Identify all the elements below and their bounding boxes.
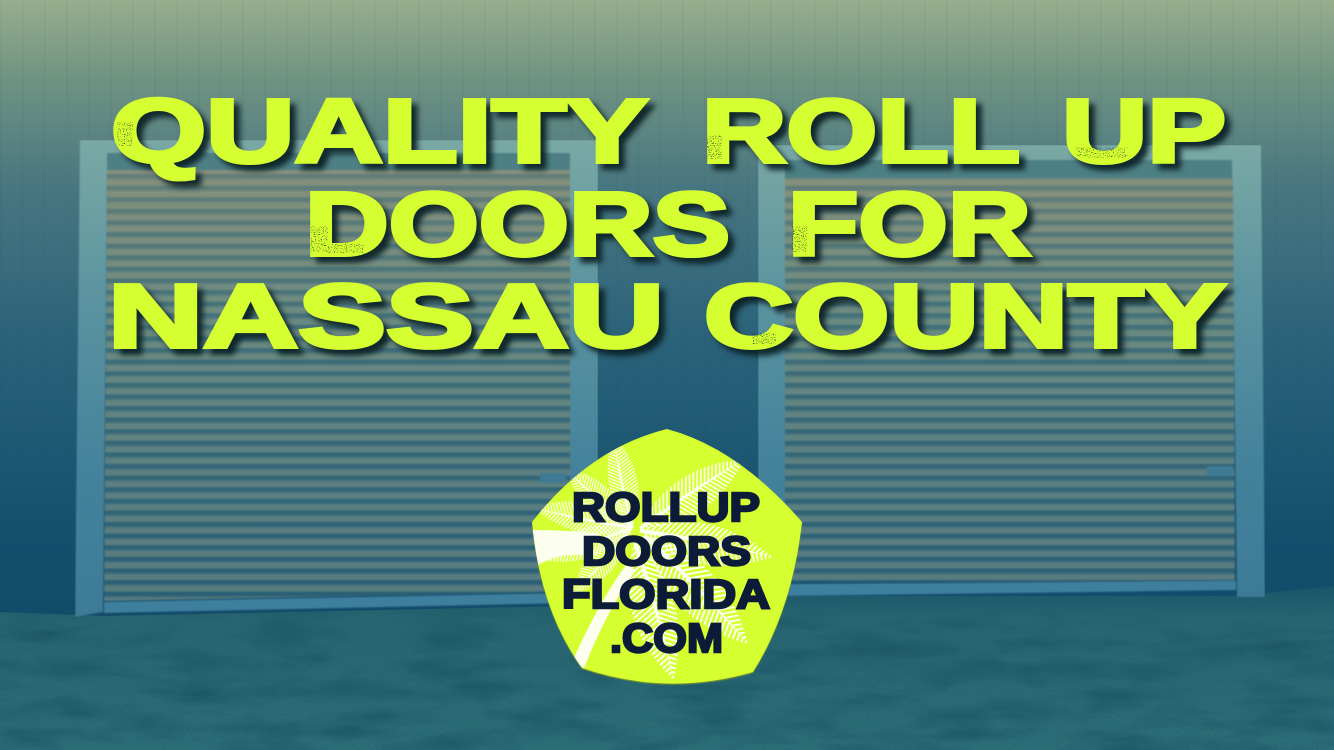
logo text: FLORIDA	[562, 571, 770, 617]
title: NASSAU	[108, 267, 664, 367]
right roll up door	[758, 145, 1265, 600]
icon: palm tree	[532, 446, 772, 680]
left door header	[107, 153, 570, 171]
left door slats	[104, 170, 570, 601]
title: FOR	[788, 175, 1031, 275]
logo text: DOORS	[582, 528, 751, 574]
title	[108, 82, 1226, 367]
right door slats	[785, 178, 1235, 582]
title: UP	[1062, 82, 1226, 182]
logo text	[562, 484, 770, 661]
right door bottom bar	[785, 581, 1236, 596]
logo shield	[532, 429, 802, 684]
title: QUALITY	[111, 82, 648, 182]
logo text: ROLLUP	[572, 484, 760, 530]
title: COUNTY	[704, 267, 1226, 367]
left door frame	[75, 140, 598, 617]
title: DOORS	[305, 175, 730, 275]
left door latch	[540, 473, 566, 483]
right door latch	[1207, 466, 1233, 476]
background: grass	[0, 586, 1334, 750]
logo text: .COM	[610, 615, 723, 661]
logo badge	[530, 429, 802, 686]
title distress speckles	[117, 122, 1128, 344]
right door header	[785, 160, 1232, 178]
right door frame	[758, 145, 1265, 600]
title: ROLL	[702, 82, 1020, 182]
left roll up door	[75, 140, 598, 617]
left door bottom bar	[104, 593, 570, 613]
